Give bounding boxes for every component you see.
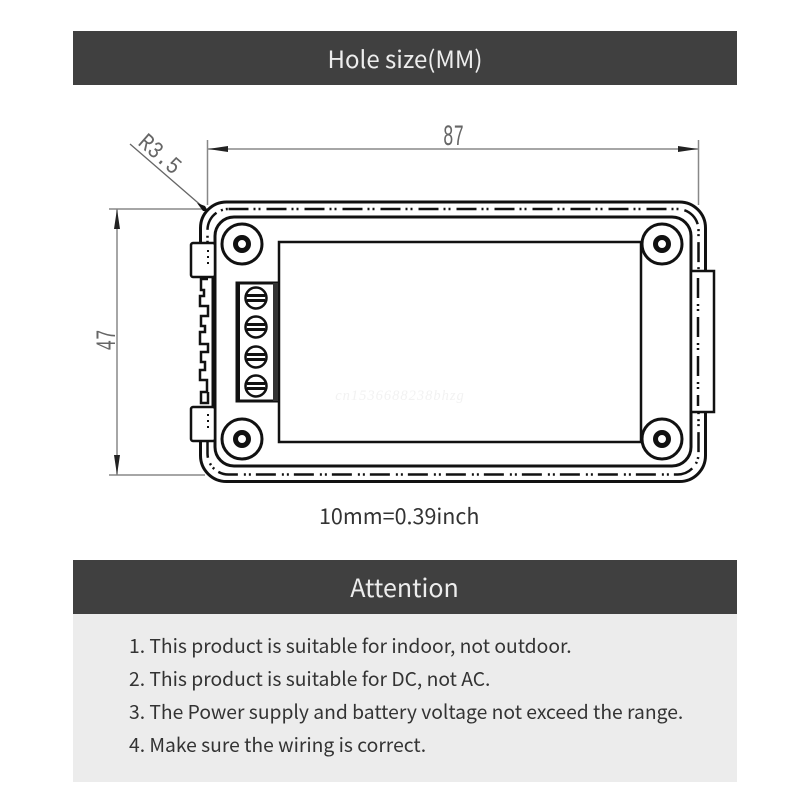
panel: attention notes: [73, 614, 737, 782]
screen opening: [279, 242, 641, 442]
dimension: height 47: 47: [92, 329, 123, 351]
note 3: 3. The Power supply and battery voltage not exceed the range.: [129, 697, 683, 725]
dimension: height 47: [92, 209, 205, 475]
heading: hole size: Hole size(MM): [328, 40, 482, 75]
heading: attention: Attention: [350, 569, 459, 605]
mounting holes: [222, 224, 682, 459]
note 4: 4. Make sure the wiring is correct.: [129, 730, 426, 758]
meter outline: [200, 202, 706, 482]
dimension: width 87: 87: [443, 122, 464, 155]
heading: attention: [73, 560, 737, 614]
terminal block: [237, 283, 278, 401]
screws: [246, 288, 266, 396]
watermark: cn1536688238bhzg: [335, 388, 465, 404]
dimension: radius R3.5: R3.5: [132, 129, 186, 181]
note 1: 1. This product is suitable for indoor, not outdoor.: [129, 631, 572, 659]
dimension: width 87: [208, 122, 698, 205]
caption: unit conversion: 10mm=0.39inch: [319, 500, 479, 531]
left clips and comb edge: [191, 243, 215, 441]
note 2: 2. This product is suitable for DC, not AC.: [129, 664, 490, 692]
right tab: [691, 271, 714, 412]
heading: hole size: [73, 31, 737, 85]
dimension: radius R3.5: [130, 129, 208, 211]
